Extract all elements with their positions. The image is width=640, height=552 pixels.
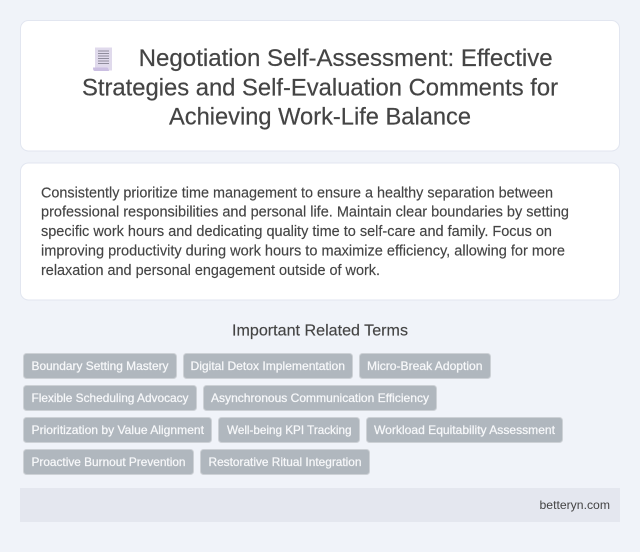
title: Achieving Work-Life Balance	[169, 104, 471, 130]
tag: Boundary Setting Mastery	[32, 359, 168, 373]
tag	[366, 418, 562, 442]
panel: summary	[20, 163, 620, 300]
tag	[204, 386, 436, 410]
footer	[20, 488, 620, 522]
tag	[24, 418, 212, 442]
summary text: specific work hours and dedicating quality time to self-care and family. Focus on	[41, 224, 552, 240]
tag: Workload Equitability Assessment	[374, 423, 556, 437]
tag: Asynchronous Communication Efficiency	[211, 391, 429, 405]
title: Negotiation Self-Assessment: Effective	[139, 45, 553, 72]
footer: betteryn.com	[540, 498, 610, 512]
tag: Well-being KPI Tracking	[227, 423, 352, 437]
summary text: improving productivity during work hours to maximize efficiency, allowing for more	[41, 243, 565, 259]
tag	[24, 386, 196, 410]
heading: related terms: Important Related Terms	[232, 322, 408, 340]
tag	[218, 418, 360, 442]
tag	[360, 354, 490, 378]
tag	[184, 354, 352, 378]
summary text: Consistently prioritize time management to ensure a healthy separation between	[41, 186, 553, 202]
title: Strategies and Self-Evaluation Comments for	[82, 74, 558, 102]
tag: Flexible Scheduling Advocacy	[32, 391, 188, 405]
tag	[24, 450, 194, 474]
tag: Digital Detox Implementation	[190, 359, 345, 373]
tag: Restorative Ritual Integration	[208, 455, 362, 469]
tag list	[24, 354, 562, 474]
tag	[200, 450, 370, 474]
tag: Micro-Break Adoption	[367, 359, 482, 373]
summary text	[41, 186, 569, 279]
tag	[24, 354, 176, 378]
panel: title card	[20, 20, 620, 151]
icon: document scroll	[93, 48, 112, 71]
summary text: professional responsibilities and personal life. Maintain clear boundaries by setting	[41, 205, 569, 221]
title	[82, 45, 558, 130]
tag: Prioritization by Value Alignment	[32, 423, 205, 437]
tag: Proactive Burnout Prevention	[32, 455, 186, 469]
summary text: relaxation and personal engagement outside of work.	[41, 263, 380, 279]
